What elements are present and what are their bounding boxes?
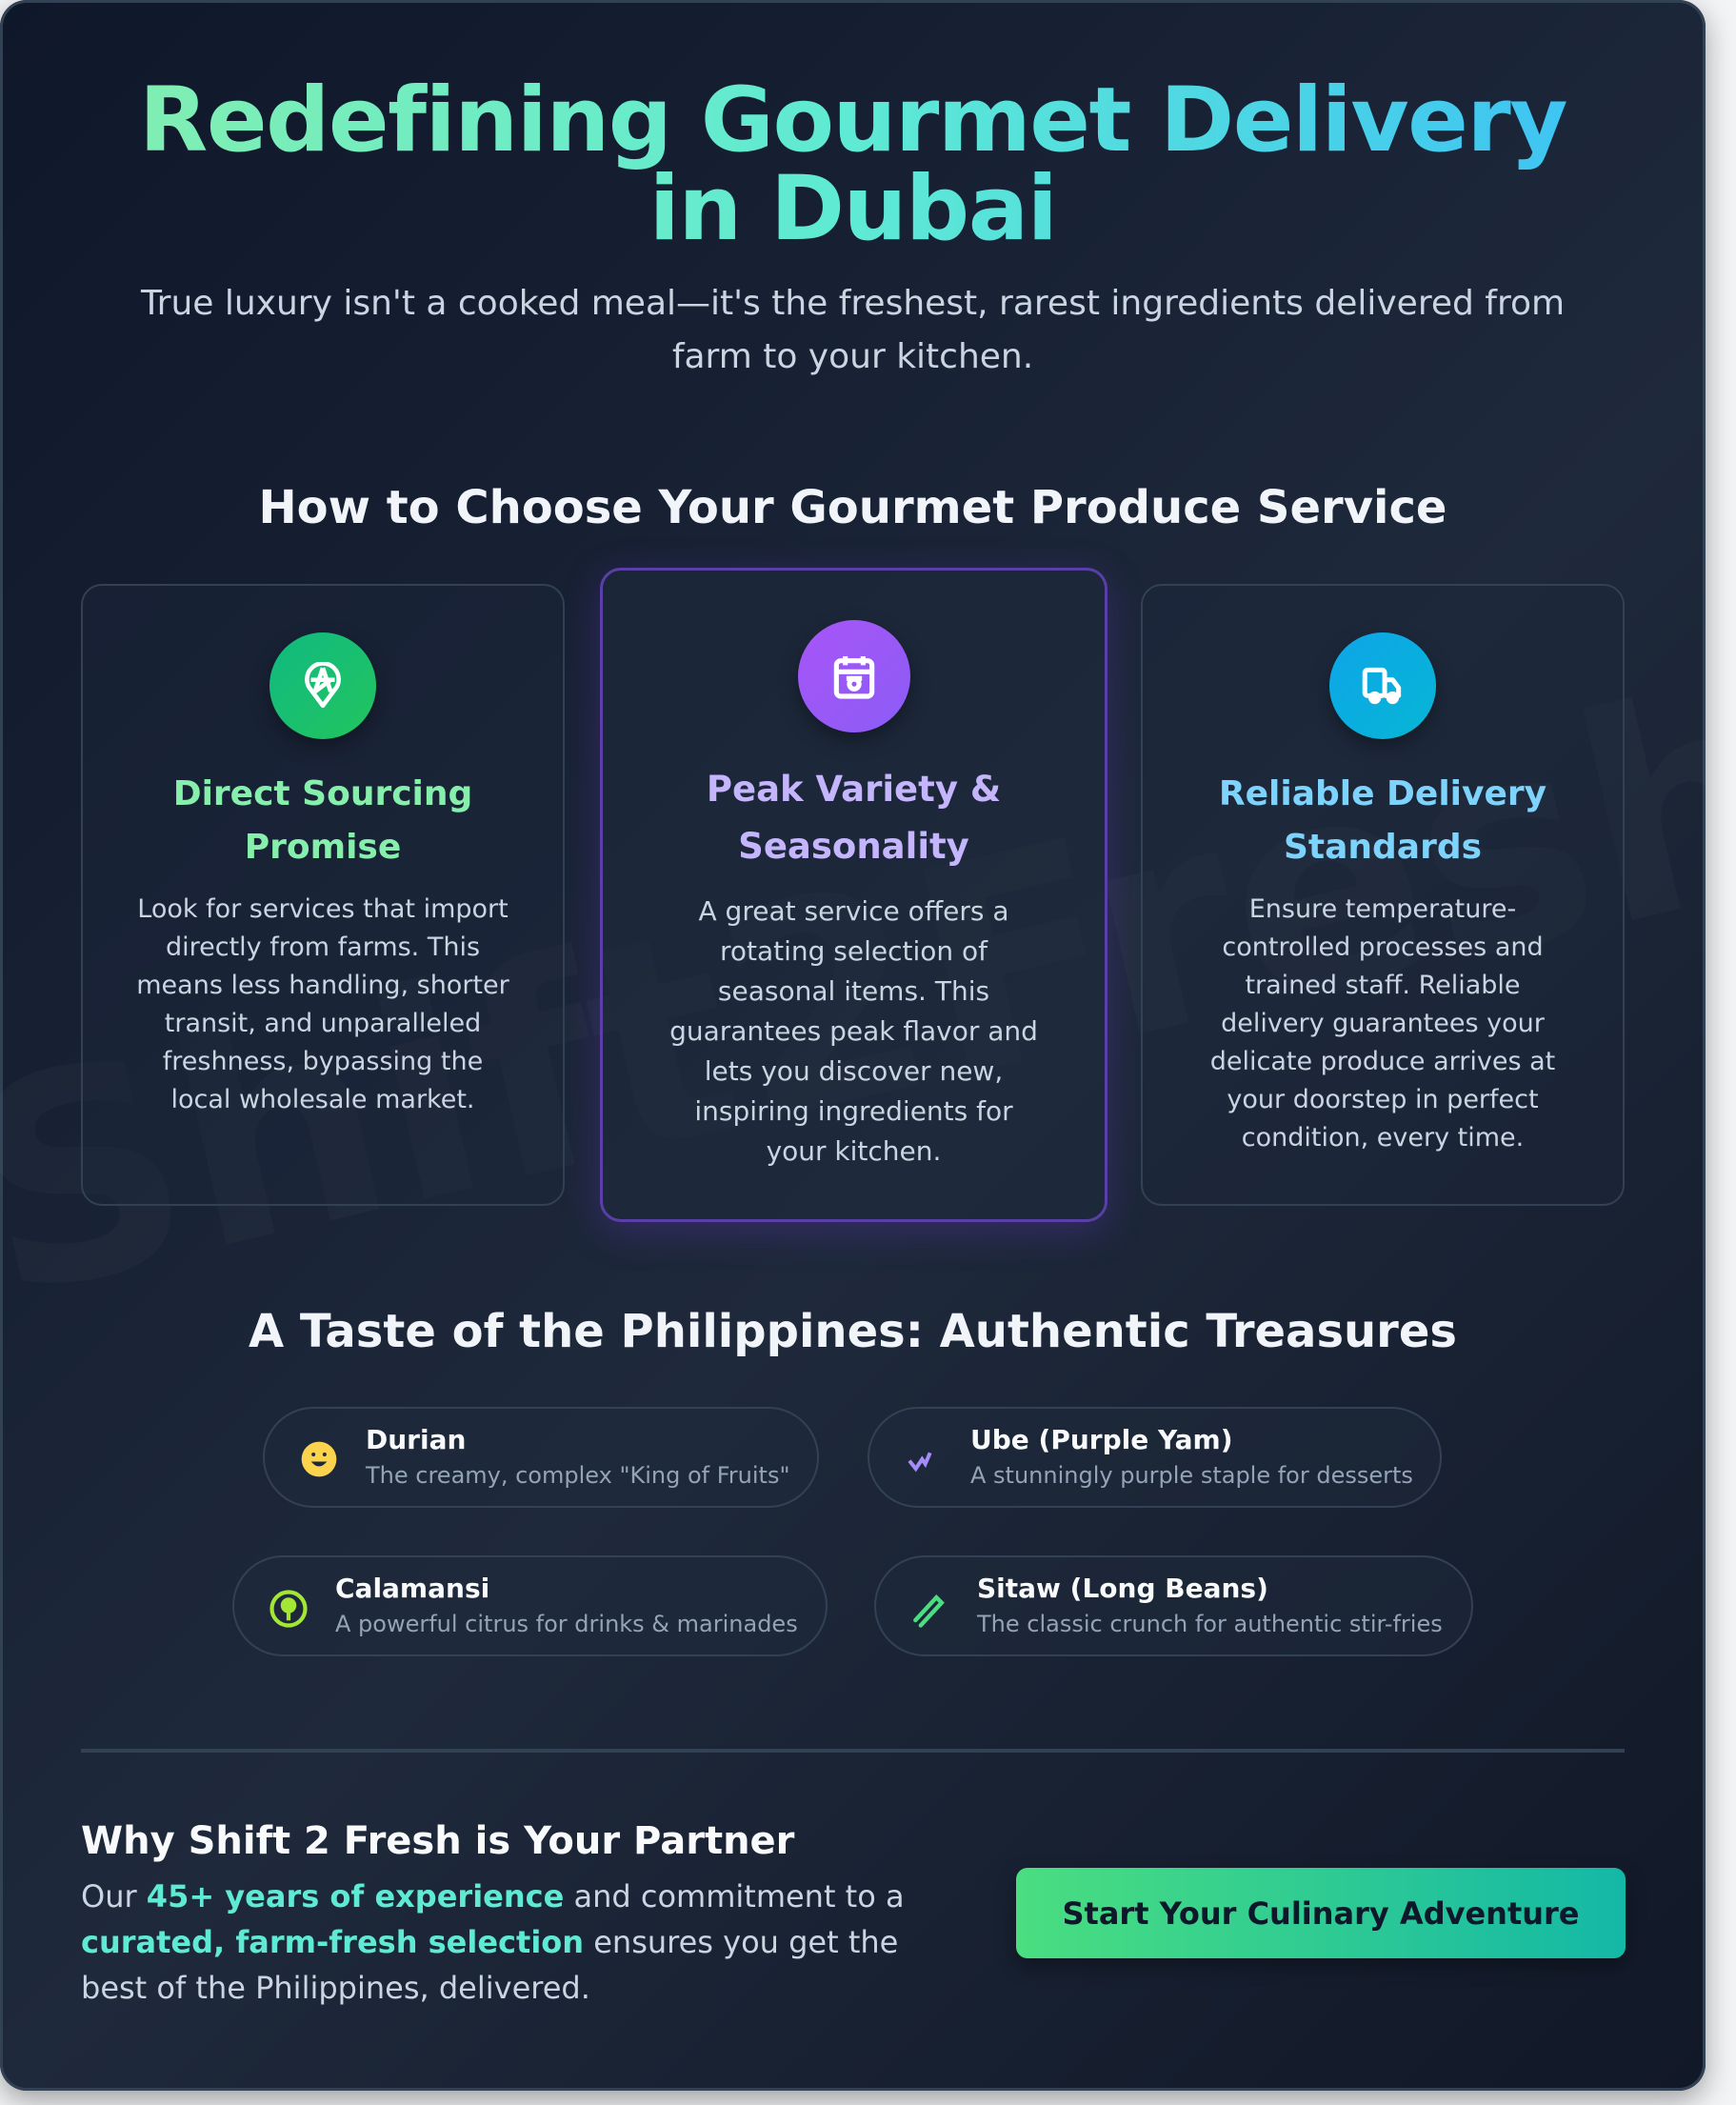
paragraph: Our 45+ years of experience and commitment to a curated, farm-fresh selection ensures you get the best of the Philippines, delivered. <box>81 1878 905 2006</box>
heading: why shift 2 fresh: Why Shift 2 Fresh is Your Partner <box>81 1819 794 1863</box>
card body: Ensure temperature-controlled processes and trained staff. Reliable delivery guarantees your delicate produce arrives at your doorstep in perfect condition, every time. <box>1210 894 1555 1153</box>
card: peak variety <box>600 568 1107 1222</box>
card title: Promise <box>245 828 401 867</box>
icon: smiley <box>301 1442 337 1476</box>
icon: citrus <box>269 1590 308 1628</box>
card body: A great service offers a rotating selection of seasonal items. This guarantees peak flavor and lets you discover new, inspiring ingredients for your kitchen. <box>669 895 1038 1167</box>
card title: Peak Variety & <box>707 769 1001 810</box>
title: in Dubai <box>649 157 1056 261</box>
card title <box>173 774 472 867</box>
pill: calamansi: Calamansi <box>335 1573 489 1604</box>
pill: sitaw: The classic crunch for authentic stir-fries <box>977 1611 1443 1637</box>
card title: Standards <box>1284 828 1482 867</box>
icon: check sprout <box>908 1452 931 1473</box>
pill: durian <box>263 1407 819 1508</box>
pill: calamansi: A powerful citrus for drinks & marinades <box>335 1611 798 1637</box>
card body: Look for services that import directly from farms. This means less handling, shorter transit, and unparalleled freshness, bypassing the local wholesale market. <box>136 894 509 1114</box>
heading: taste of philippines: A Taste of the Philippines: Authentic Treasures <box>249 1305 1457 1358</box>
pill: calamansi <box>232 1555 828 1656</box>
card title: Direct Sourcing <box>173 774 472 813</box>
card title: Seasonality <box>738 826 969 867</box>
icon: truck <box>1329 632 1436 739</box>
pill: ube <box>868 1407 1442 1508</box>
card: reliable delivery <box>1141 584 1625 1206</box>
card title <box>707 769 1001 867</box>
heading: how to choose: How to Choose Your Gourmet Produce Service <box>259 481 1447 534</box>
pill: ube: Ube (Purple Yam) <box>970 1424 1233 1455</box>
title <box>0 76 1706 253</box>
pill: sitaw <box>874 1555 1473 1656</box>
subtitle: True luxury isn't a cooked meal—it's the freshest, rarest ingredients delivered from farm to your kitchen. <box>141 284 1565 376</box>
icon: globe pin <box>269 632 376 739</box>
pill: sitaw: Sitaw (Long Beans) <box>977 1573 1268 1604</box>
icon: long bean <box>913 1594 945 1628</box>
button: CTA: Start Your Culinary Adventure <box>1062 1895 1579 1932</box>
pill: durian: Durian <box>366 1424 466 1455</box>
card title: Reliable Delivery <box>1219 774 1546 813</box>
pill: ube: A stunningly purple staple for desserts <box>970 1462 1413 1489</box>
card title <box>1219 774 1546 867</box>
button: CTA <box>1016 1868 1626 1958</box>
card: direct sourcing <box>81 584 565 1206</box>
icon: calendar <box>798 620 910 732</box>
pill: durian: The creamy, complex "King of Fruits" <box>366 1462 790 1489</box>
title: Redefining Gourmet Delivery <box>139 69 1566 172</box>
